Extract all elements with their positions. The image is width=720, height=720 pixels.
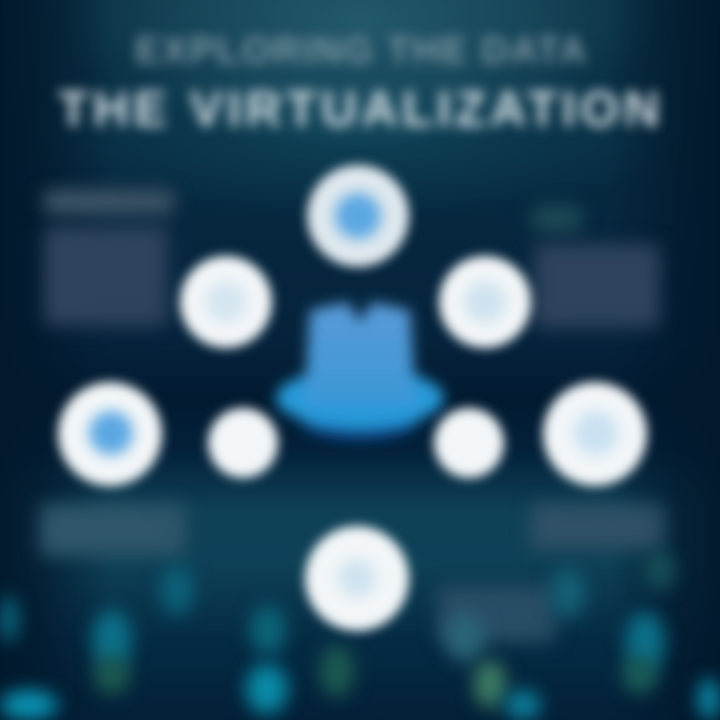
text block: upper right body: [534, 244, 660, 328]
text block: upper right body: systems and linked: [534, 284, 645, 299]
text block: upper right body: Data sets are stored: [534, 246, 651, 261]
text block: bottom centre right: source data with: [438, 607, 533, 622]
text block: upper left heading: [44, 190, 174, 214]
node: right: [534, 373, 656, 495]
node: upper left: [171, 247, 281, 357]
node: bottom: [296, 517, 418, 640]
text block: lower right: across many virtual: [530, 525, 642, 540]
text block: lower right: Integration of data: [530, 506, 635, 521]
text block: upper right body: across many virtual: [534, 265, 646, 280]
title line two: THE VIRTUALIZATION: [58, 81, 664, 137]
text block: bottom centre right: [438, 586, 556, 642]
text block: upper left body: systems and linked: [44, 266, 155, 281]
text block: upper left heading: Overview: [44, 192, 120, 211]
text block: upper right heading: Access: [532, 207, 578, 222]
text block: upper left body: across many virtual: [44, 247, 156, 262]
text block: bottom centre right: Query access to: [438, 588, 532, 603]
node: upper right: [430, 247, 540, 357]
node: inner left: [208, 408, 278, 478]
text block: upper left body: together by shared: [44, 285, 152, 300]
glowing data dots: [0, 549, 720, 720]
node: left: [49, 373, 171, 495]
text block: bottom centre right: shared services: [438, 626, 529, 641]
text block: upper right heading: [532, 205, 582, 233]
central icon: blue cloud book: [266, 293, 454, 448]
title line one: EXPLORING THE DATA: [135, 30, 588, 72]
text block: lower left: [40, 504, 186, 556]
text block: lower left: Integration of data: [40, 506, 145, 521]
node: top: [298, 156, 418, 276]
text block: upper left body: services: [44, 304, 92, 319]
text block: upper left body: [44, 226, 168, 326]
text block: lower right: [530, 504, 664, 550]
text block: lower left: across many virtual: [40, 525, 152, 540]
text block: upper right body: together by shared: [534, 303, 642, 318]
node: inner right: [434, 408, 504, 478]
text block: upper left body: Data sets are stored: [44, 228, 161, 243]
